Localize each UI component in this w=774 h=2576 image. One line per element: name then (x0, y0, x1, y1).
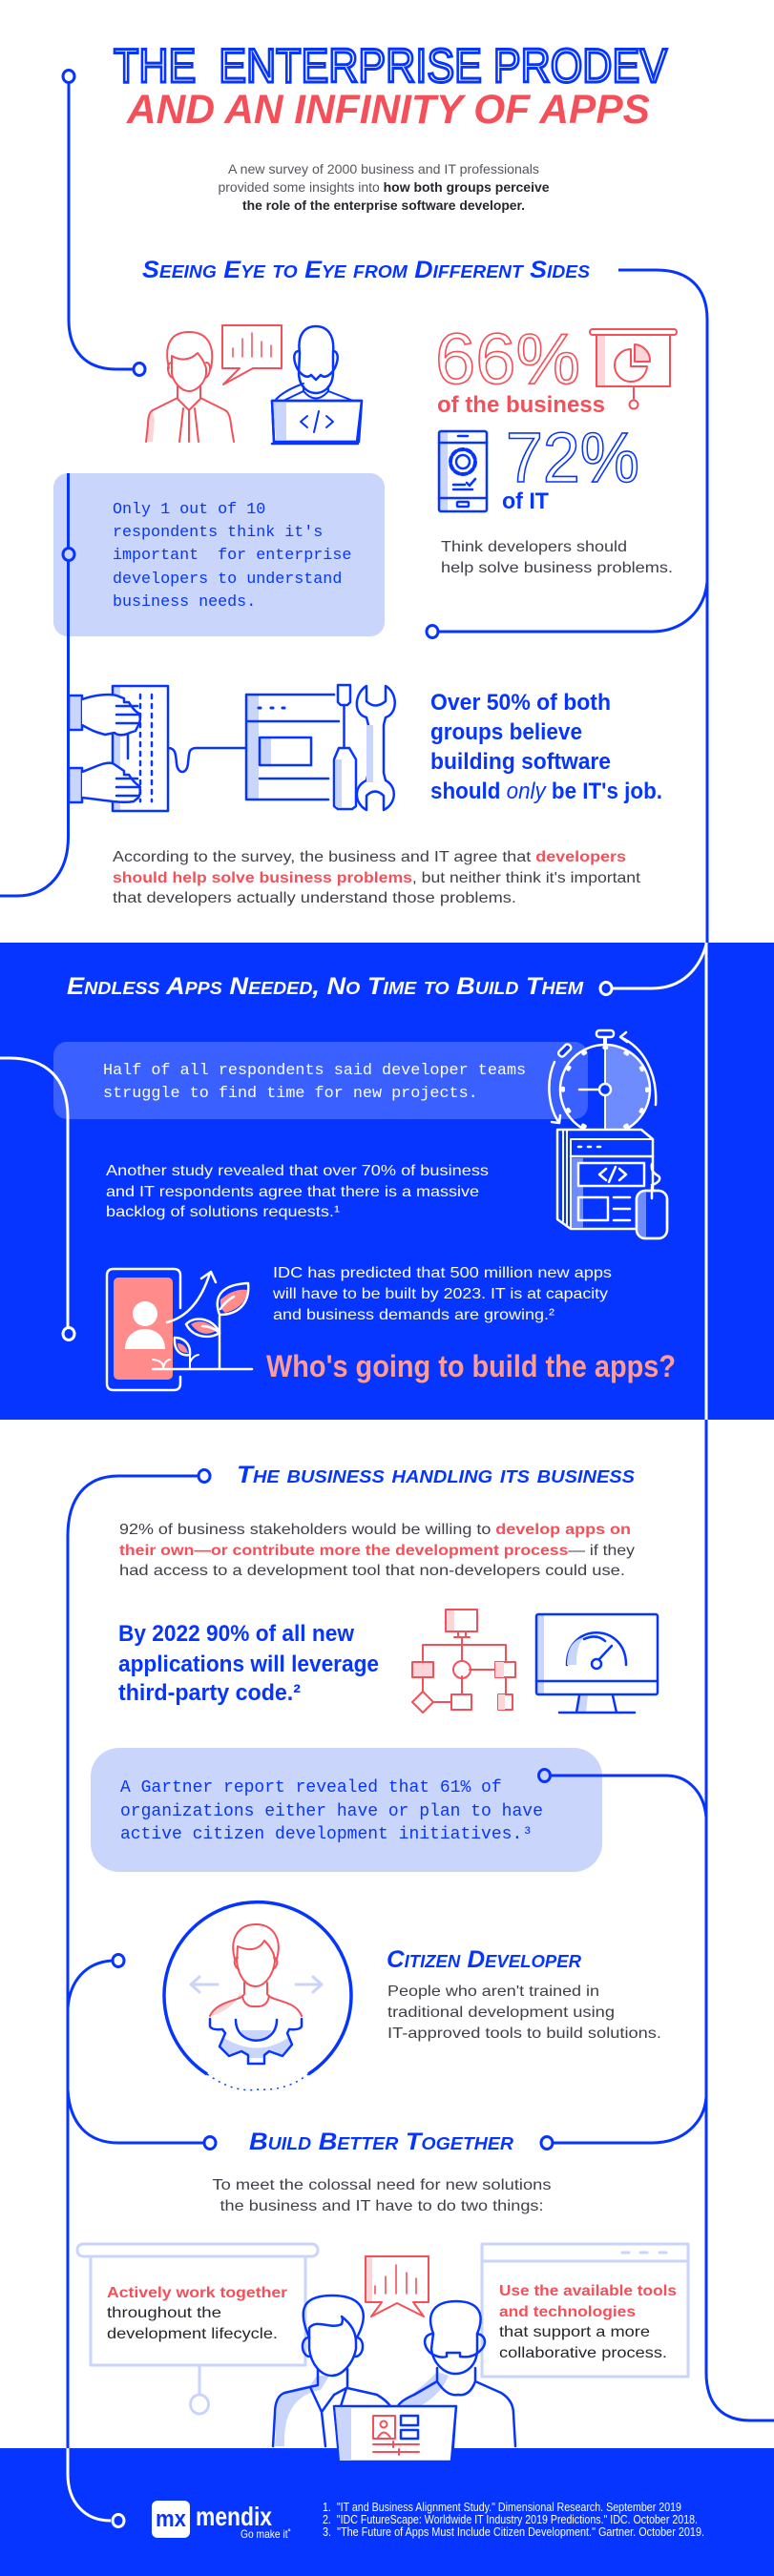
logo: mendix: Go make it˚ (241, 2527, 291, 2541)
heading: the business handling its business: The business handling its business (237, 1462, 635, 1488)
panel: blue band, endless apps (0, 943, 774, 1420)
icon: chart speech bubble, red (366, 2256, 429, 2316)
panel: window, use the available tools (482, 2244, 688, 2377)
footnotes: 3. "The Future of Apps Must Include Citizen Development." Gartner. October 2019. (323, 2525, 704, 2539)
text: who's going to build the apps: Who's going to build the apps? (266, 1349, 676, 1383)
icon: business person and developer (146, 325, 362, 444)
icon: mouse (637, 1164, 667, 1238)
callout text: half of respondents: struggle to find time for new projects. (103, 1085, 478, 1103)
connector: build better together, right branch (541, 2097, 706, 2149)
text: according to the survey (113, 849, 641, 906)
panel: blue footer band (0, 2448, 774, 2576)
panel: presentation board, actively work together: Actively work together (107, 2285, 287, 2301)
text: citizen developer definition: IT-approved tools to build solutions. (387, 2025, 661, 2042)
connector: title to first icons (63, 71, 145, 376)
text: according to the survey: should help solve business problems , but neither think it's important (113, 870, 641, 886)
icon: stacked windows (557, 1130, 653, 1229)
logo: mendix: mx (156, 2506, 187, 2532)
callout: only 1 out of 10 (53, 473, 385, 636)
callout: gartner report (91, 1748, 602, 1872)
callout text: half of respondents (103, 1062, 526, 1103)
connector: left line beside callout (0, 548, 74, 896)
text: another study: Another study revealed that over 70% of business (106, 1163, 489, 1179)
text: IDC has predicted: and business demands are growing.² (273, 1307, 555, 1323)
text: IDC has predicted: IDC has predicted that 500 million new apps (273, 1265, 612, 1281)
callout text: half of respondents: Half of all respondents said developer teams (103, 1062, 526, 1080)
text: 92 percent of business stakeholders: 92% of business stakeholders would be willing to develop apps on (119, 1522, 631, 1538)
connector: white left line in blue band (0, 1058, 74, 1340)
heading: seeing eye to eye: Seeing Eye to Eye from Different Sides (142, 257, 590, 283)
text: over 50 percent (430, 690, 662, 804)
heading: citizen developer: Citizen Developer (387, 1946, 581, 1973)
panel: presentation board, actively work together: throughout the (107, 2305, 221, 2321)
text: by 2022 90 percent (118, 1621, 379, 1706)
icon: chart speech bubble (222, 325, 282, 384)
connector: white branch to second heading (600, 945, 706, 994)
icon: right person (398, 2301, 515, 2446)
connector: citizen developer branch (68, 1954, 124, 2008)
callout: only 1 out of 10: Only 1 out of 10 (113, 501, 265, 519)
icon: wrench (357, 686, 395, 810)
stat: 72 percent of IT: of IT (502, 488, 549, 514)
text: over 50 percent: should only be IT's job. (430, 779, 662, 804)
text: to meet the colossal need: the business and IT have to do two things: (220, 2198, 544, 2214)
text: citizen developer definition: People who aren't trained in (387, 1984, 599, 2000)
text: 92 percent of business stakeholders: their own—or contribute more the development process — if they (119, 1543, 635, 1559)
footnotes: 1. "IT and Business Alignment Study." Dimensional Research. September 2019 (323, 2501, 681, 2514)
text: think developers should: help solve business problems. (441, 560, 673, 576)
text: by 2022 90 percent: third-party code.² (118, 1680, 301, 1706)
panel: window, use the available tools: collaborative process. (499, 2345, 667, 2361)
stat: 66 percent of the business: 66% (435, 319, 580, 399)
panel: window, use the available tools: Use the available tools (499, 2283, 677, 2299)
connector: left line of third section (68, 1469, 210, 2526)
callout: only 1 out of 10: developers to understand (113, 571, 342, 589)
stat: 66 percent of the business (435, 319, 605, 418)
text: according to the survey: that developers actually understand those problems. (113, 890, 516, 906)
text: over 50 percent: Over 50% of both (430, 690, 611, 716)
title (114, 39, 668, 133)
title: THE ENTERPRISE PRODEV (114, 39, 668, 93)
connector: main right line through the page (618, 270, 774, 2420)
callout: only 1 out of 10: important for enterprise (113, 547, 351, 565)
connector: gartner branch (538, 1769, 706, 1818)
logo: mendix: mendix (196, 2502, 272, 2531)
footnotes (323, 2501, 704, 2539)
text: another study (106, 1163, 489, 1220)
connector: right branch to 66 percent block (427, 582, 707, 637)
text: citizen developer definition (387, 1984, 661, 2042)
text: over 50 percent: groups believe (430, 719, 582, 745)
icon: citizen developer circle (164, 1902, 351, 2090)
text: to meet the colossal need (212, 2177, 552, 2214)
text: citizen developer definition: traditional development using (387, 2005, 615, 2021)
title: AND AN INFINITY OF APPS (126, 87, 650, 133)
icon: monitor with gauge (536, 1614, 658, 1713)
intro text: A new survey of 2000 business and IT professionals (228, 161, 539, 177)
icon: red business person (146, 332, 234, 442)
icon: screwdriver (334, 685, 356, 809)
icon: phone with gear (439, 431, 487, 511)
panel: presentation board, actively work together: development lifecycle. (107, 2326, 278, 2342)
text: by 2022 90 percent: applications will leverage (118, 1652, 379, 1677)
icon: phone with growing plant (107, 1269, 252, 1390)
icon: red person (210, 1924, 302, 2016)
heading: build better together: Build Better Together (249, 2129, 513, 2155)
icon: two people behind laptop (273, 2296, 515, 2463)
text: according to the survey: According to the survey, the business and IT agree that developers (113, 849, 626, 865)
text: IDC has predicted: will have to be built by 2023. IT is at capacity (272, 1286, 608, 1302)
stat: 66 percent of the business: of the business (437, 392, 605, 418)
heading: endless apps needed: Endless Apps Needed, No Time to Build Them (67, 973, 584, 1000)
icon: blue gear (210, 2019, 302, 2064)
text: IDC has predicted (272, 1265, 612, 1323)
intro text: provided some insights into how both groups perceive (218, 179, 550, 195)
callout: gartner report: organizations either have or plan to have (120, 1802, 543, 1821)
icon: arrows (191, 1977, 322, 1992)
panel: presentation board, actively work together (77, 2244, 318, 2414)
text: by 2022 90 percent: By 2022 90% of all new (118, 1621, 354, 1647)
callout: only 1 out of 10: respondents think it's (113, 524, 323, 542)
connector: build better together, left branch (68, 2089, 216, 2149)
text: 92 percent of business stakeholders: had access to a development tool that non-developers could use. (119, 1563, 625, 1579)
text: over 50 percent: building software (430, 749, 611, 775)
intro text (218, 161, 550, 213)
icon: stopwatch on stacked windows (549, 1030, 667, 1238)
callout: gartner report: active citizen development initiatives.³ (120, 1825, 533, 1844)
text: think developers should (441, 539, 673, 576)
text: think developers should: Think developers should (441, 539, 627, 555)
text: another study: and IT respondents agree that there is a massive (106, 1184, 479, 1200)
intro text: the role of the enterprise software developer. (242, 197, 525, 213)
panel: window, use the available tools: that support a more (499, 2324, 650, 2340)
text: to meet the colossal need: To meet the colossal need for new solutions (212, 2177, 552, 2193)
icon: hands on keyboard (69, 686, 168, 811)
text: another study: backlog of solutions requests.¹ (106, 1204, 340, 1220)
stat: 72 percent of IT: 72% (506, 418, 639, 497)
icon: laptop (334, 2406, 456, 2463)
panel: window, use the available tools: and technologies (499, 2304, 636, 2320)
footnotes: 2. "IDC FutureScape: Worldwide IT Industry 2019 Predictions." IDC. October 2018. (323, 2513, 698, 2526)
icon: left person (273, 2296, 390, 2446)
icon: developer with laptop (272, 326, 362, 444)
icon: window with tools (168, 685, 395, 810)
icon: red profile screen (373, 2416, 419, 2455)
text: 92 percent of business stakeholders (119, 1522, 635, 1579)
icon: presentation board with pie chart (590, 329, 677, 408)
icon: red flowchart (412, 1610, 515, 1713)
callout: only 1 out of 10: business needs. (113, 593, 256, 612)
logo: mendix (152, 2501, 291, 2541)
callout: gartner report: A Gartner report revealed that 61% of (120, 1778, 502, 1797)
panel: translucent callout, half of respondents (53, 1042, 588, 1119)
